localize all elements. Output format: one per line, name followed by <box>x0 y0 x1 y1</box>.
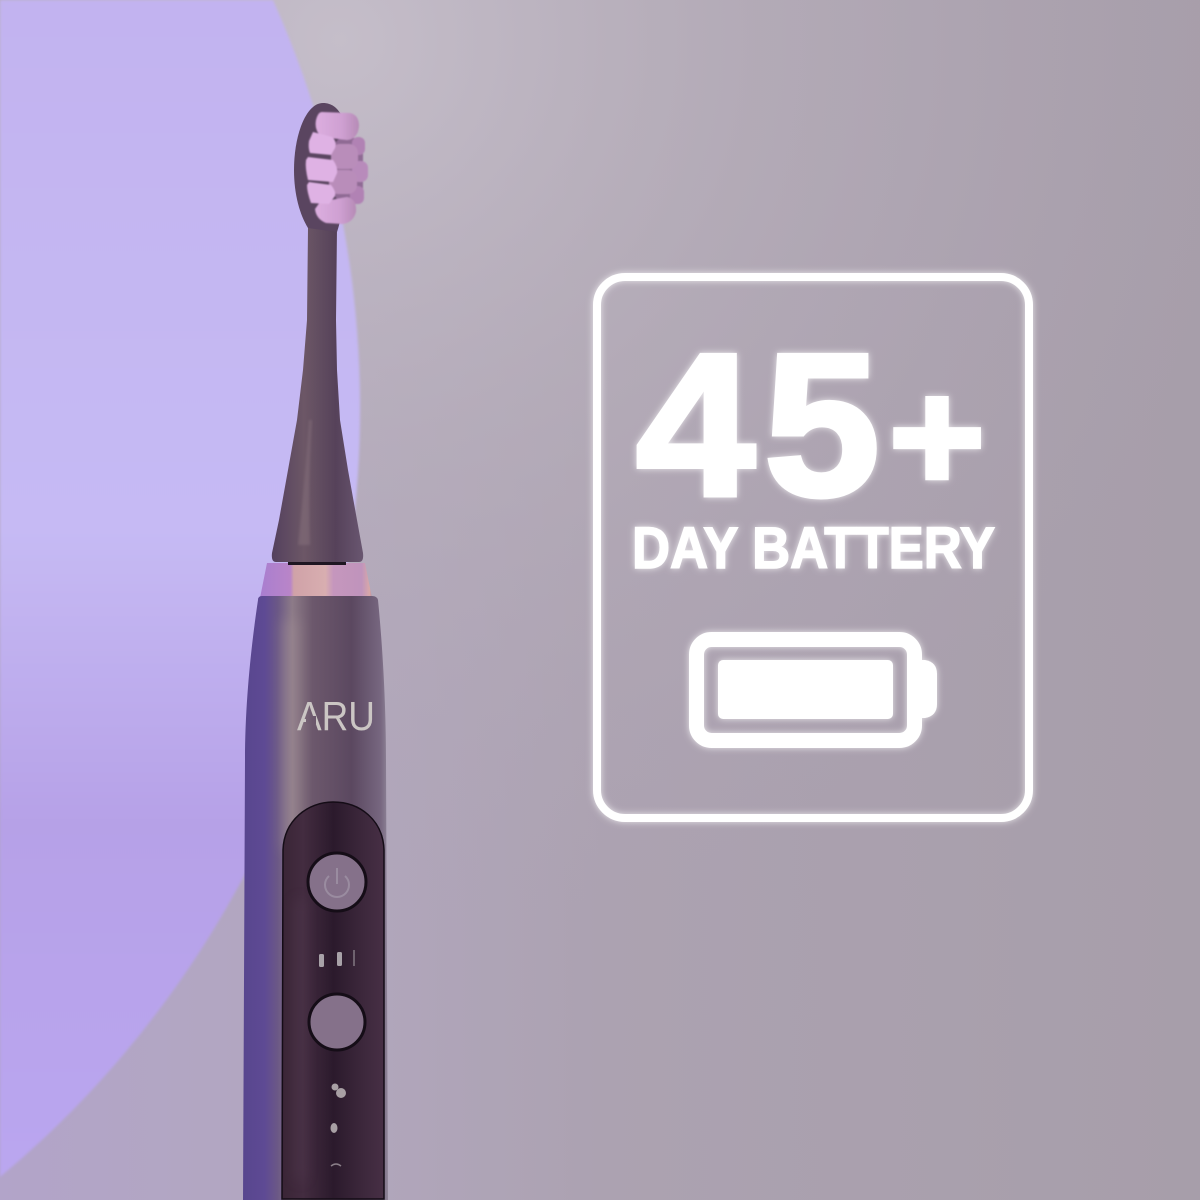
cone highlight <box>298 420 312 545</box>
logo: ARU <box>297 693 375 739</box>
body highlight <box>282 620 298 850</box>
panel reflection <box>296 900 304 1180</box>
battery icon <box>696 640 937 740</box>
mode button <box>309 994 365 1050</box>
panel icons <box>330 1084 346 1166</box>
day battery label: DAY BATTERY <box>632 516 995 581</box>
big number: + <box>889 350 985 524</box>
collar gap <box>288 562 346 565</box>
big number: 4 <box>636 312 755 539</box>
brush neck and cone <box>272 228 363 562</box>
handle body <box>243 596 388 1200</box>
power button <box>308 853 366 911</box>
bristle tufts <box>306 112 368 224</box>
big number: 5 <box>764 312 880 539</box>
badge frame <box>597 277 1029 818</box>
collar ring <box>260 563 372 598</box>
toothbrush <box>243 103 388 1200</box>
battery badge <box>597 277 1029 818</box>
brush head <box>294 103 347 232</box>
lavender light circle <box>0 0 360 1177</box>
big number <box>636 312 985 539</box>
LED indicators <box>319 950 355 967</box>
control panel <box>282 802 384 1199</box>
